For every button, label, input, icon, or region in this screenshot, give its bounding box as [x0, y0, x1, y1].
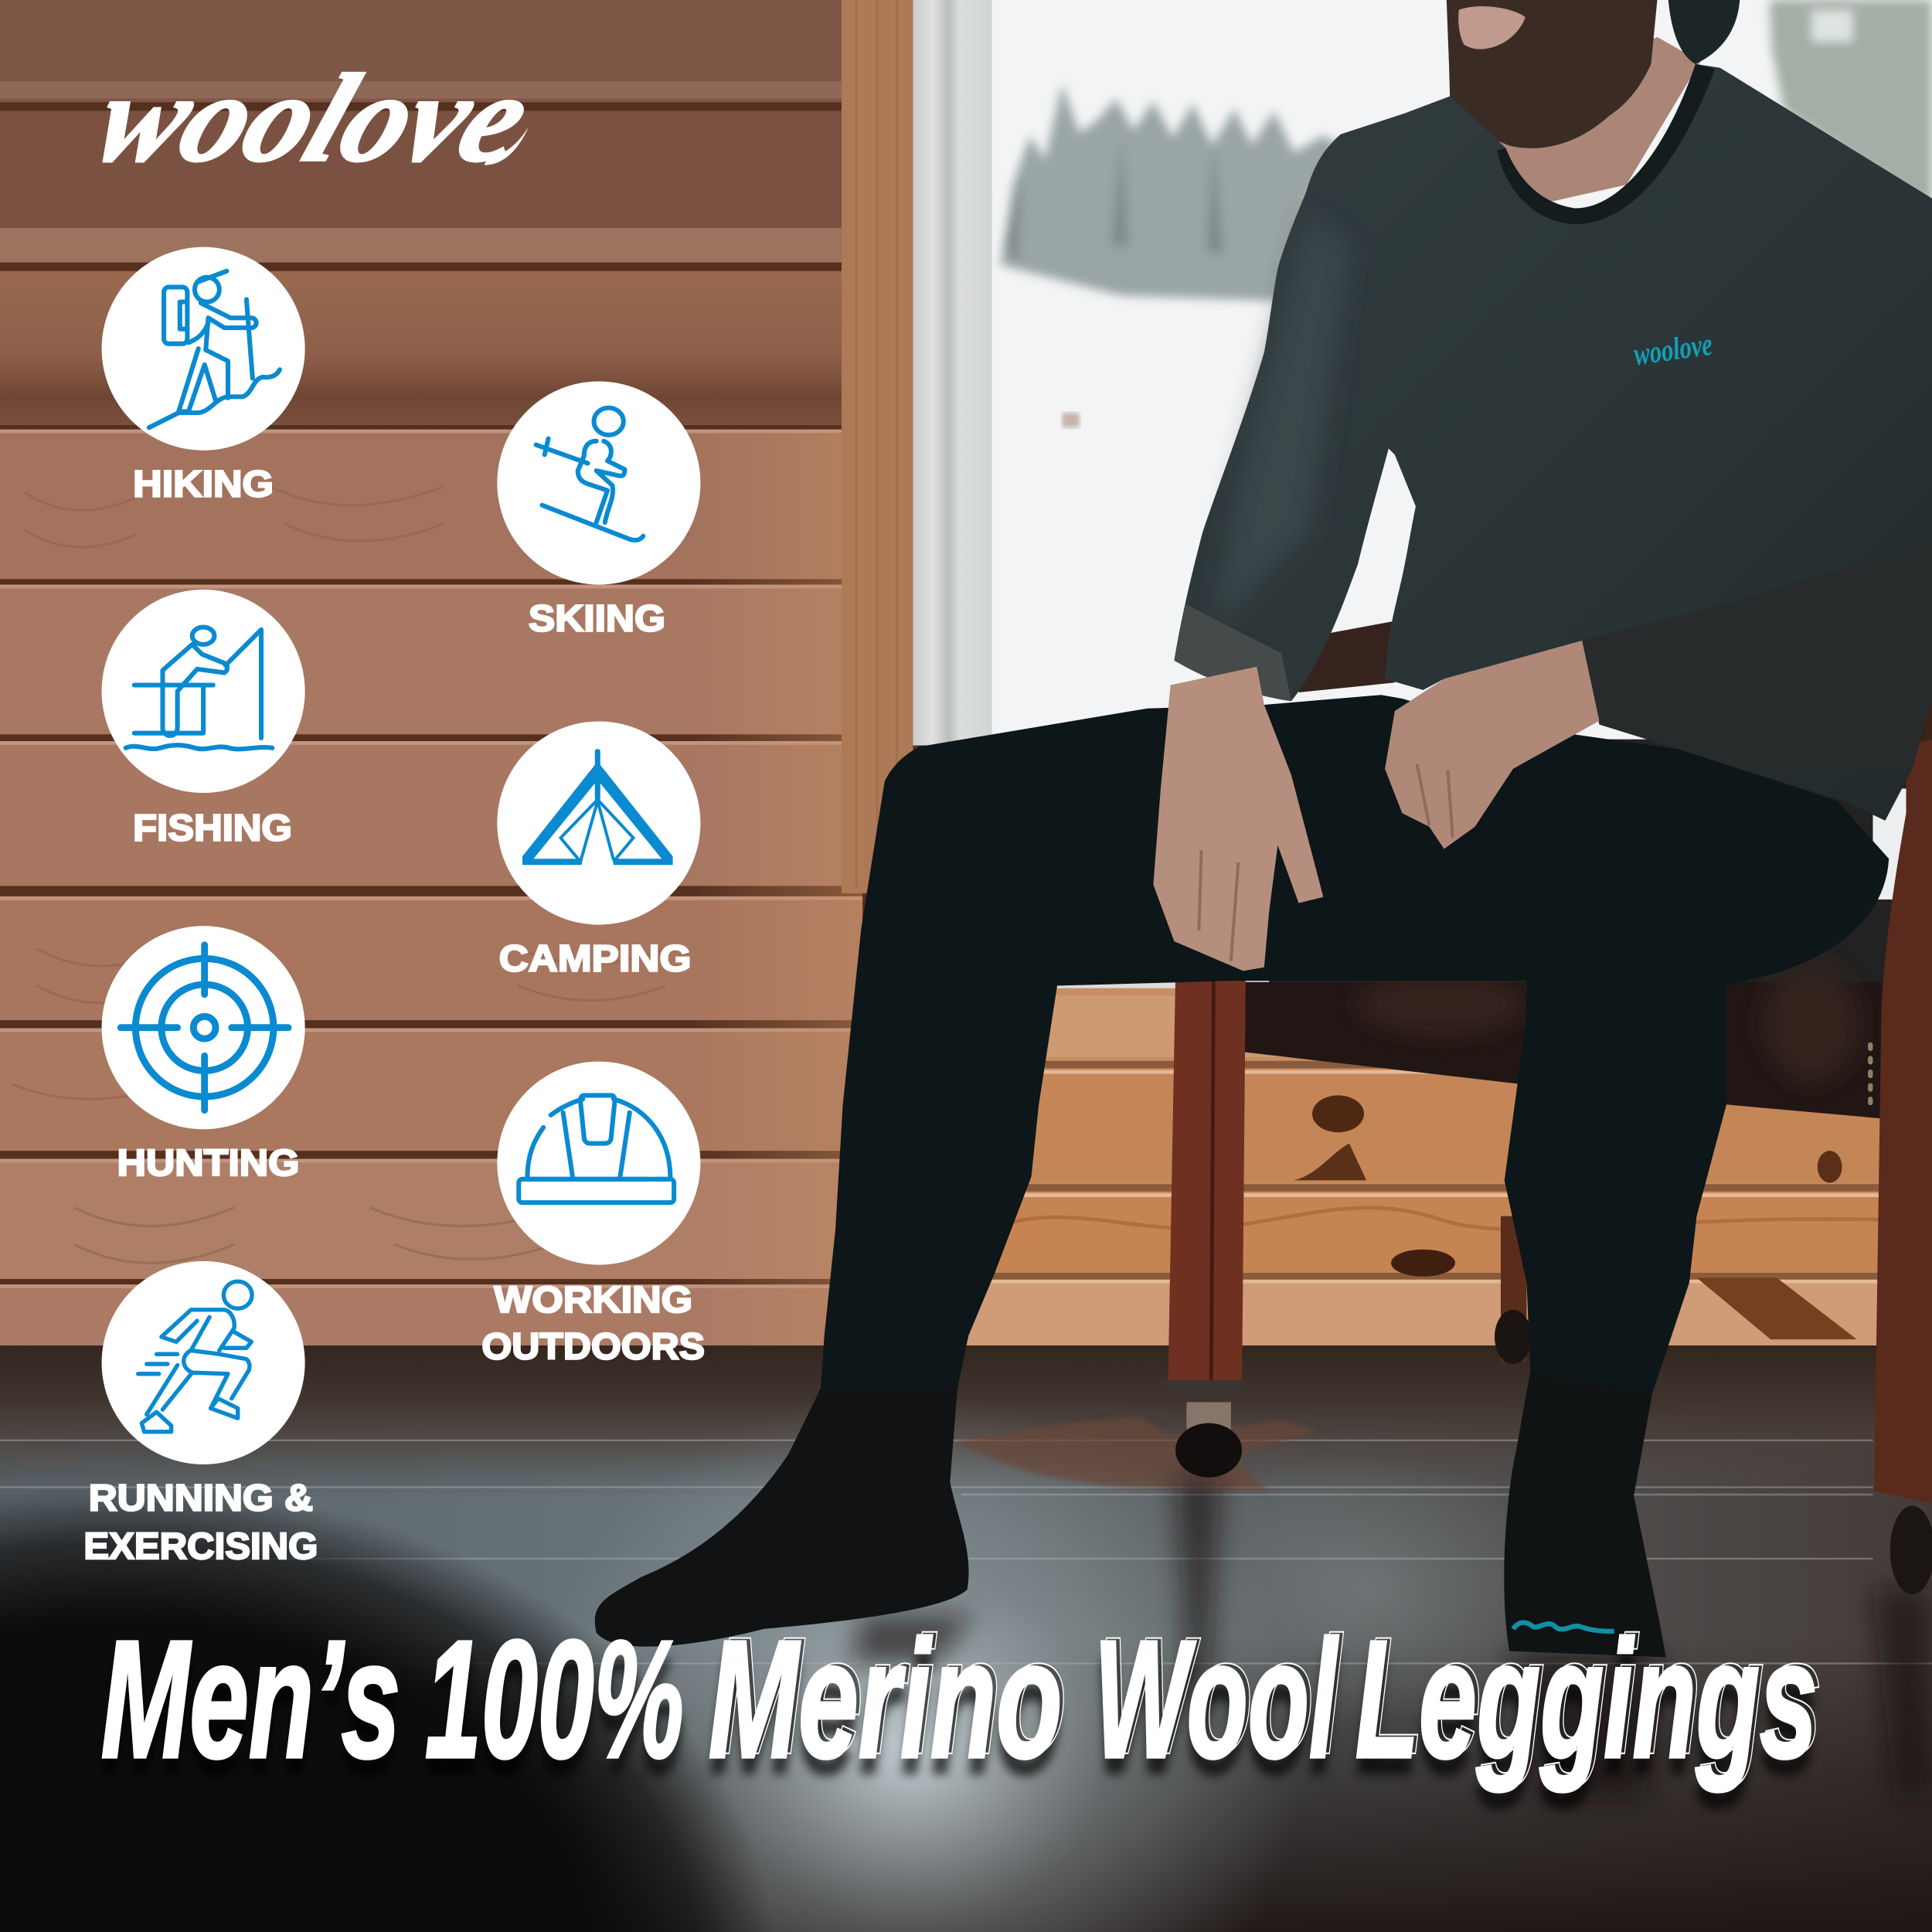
chair: front leg [1168, 978, 1246, 1380]
circle: running [102, 1261, 305, 1464]
label: skiing: SKIING [529, 598, 665, 639]
circle: camping [497, 722, 700, 925]
title: text [101, 1606, 1818, 1793]
activity: hiking [102, 247, 305, 505]
panel: wood wall [0, 0, 918, 1355]
title: text: 100% [425, 1606, 684, 1793]
icon: skier [536, 408, 643, 540]
floor: stain [955, 1417, 1318, 1492]
title: text: Wool [1094, 1606, 1338, 1793]
circle: hiking [102, 247, 305, 451]
label: hunting: HUNTING [117, 1143, 299, 1184]
icon: target [121, 945, 288, 1111]
activity: running and exercising [83, 1261, 318, 1567]
title: outline: Wool [1099, 1602, 1344, 1789]
icon: fisherman [126, 628, 272, 749]
chair: right leg [1874, 740, 1932, 1503]
man: shirt [1174, 64, 1932, 821]
title: shadow [101, 1623, 1818, 1810]
title: shadow: Men’s [101, 1623, 400, 1810]
icon: hiker [149, 271, 280, 427]
circle: skiing [497, 381, 700, 585]
activity: working outdoors [481, 1062, 705, 1368]
label: running and exercising: RUNNING & [89, 1478, 313, 1519]
circle: hunting [102, 926, 305, 1129]
title: outline [725, 1631, 1819, 1785]
label: working outdoors [481, 1280, 705, 1368]
chair [1165, 621, 1932, 1594]
man: head and neck [1447, 0, 1740, 209]
man: hands [1153, 641, 1600, 971]
chair: seat [1223, 982, 1885, 1119]
label: running and exercising: EXERCISING [83, 1526, 318, 1567]
label: running and exercising [83, 1478, 318, 1567]
floor: reflections [850, 1478, 1932, 1799]
activity: hunting [102, 926, 305, 1184]
floor [0, 1345, 1932, 1932]
man: leggings [821, 695, 1889, 1393]
floor: dark corner [0, 1478, 788, 1932]
man: shirt: woolove [1631, 326, 1715, 372]
label: hiking: HIKING [133, 464, 274, 505]
circle: fishing [102, 590, 305, 793]
activity: skiing [497, 381, 700, 639]
icon: hard hat [519, 1095, 674, 1202]
label: fishing: FISHING [133, 808, 292, 849]
chair: back rail [1298, 621, 1395, 692]
icon: tent [522, 752, 673, 865]
circle: working outdoors [497, 1062, 700, 1265]
logo: woolove: woolove [79, 49, 548, 188]
man: socks [595, 1372, 1666, 1657]
panel: wood wall behind chair [862, 980, 1885, 1349]
title: shadow: 100% [425, 1623, 684, 1810]
activity: fishing [102, 590, 305, 849]
window: treeline [1001, 83, 1417, 301]
label: working outdoors: WORKING [494, 1280, 692, 1321]
title: text: Men’s [101, 1606, 400, 1793]
label: camping: CAMPING [499, 938, 691, 979]
icon: runner [138, 1281, 252, 1432]
title: outline: Merino [713, 1602, 1067, 1789]
man [595, 0, 1932, 1657]
activity: camping [497, 722, 700, 979]
label: working outdoors: OUTDOORS [481, 1327, 705, 1368]
title [102, 1631, 1819, 1813]
title: shadow: Wool [1094, 1623, 1338, 1810]
title: text: Merino [709, 1606, 1062, 1793]
window [913, 0, 1932, 900]
title: shadow: Merino [709, 1623, 1062, 1810]
